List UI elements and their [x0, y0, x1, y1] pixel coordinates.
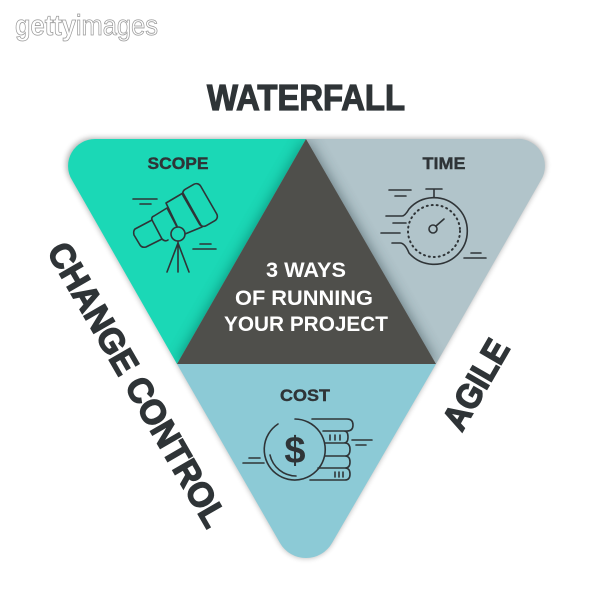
center text — [224, 259, 388, 336]
icon: stopwatch — [381, 189, 486, 264]
panel: outer shadow — [66, 138, 546, 558]
center text: 3 WAYS — [266, 259, 346, 282]
icon: coin and stacked money — [243, 419, 372, 480]
heading: TIME: TIME — [422, 154, 466, 173]
watermark: gettyimages: gettyimages — [15, 10, 158, 42]
icon: telescope — [133, 182, 219, 272]
panel: scope — [68, 139, 312, 364]
center text: YOUR PROJECT — [224, 313, 388, 336]
label: CHANGE CONTROL: CHANGE CONTROL — [39, 236, 234, 534]
center text: OF RUNNING — [235, 287, 373, 310]
panel: time — [298, 139, 545, 364]
title: WATERFALL: WATERFALL — [207, 77, 405, 118]
heading: SCOPE: SCOPE — [148, 154, 208, 173]
label: AGILE: AGILE — [435, 333, 518, 437]
heading: COST: COST — [280, 386, 331, 405]
panel: center triangle — [177, 139, 436, 364]
panel: cost — [177, 364, 436, 558]
icon: dollar sign: $ — [284, 430, 306, 472]
